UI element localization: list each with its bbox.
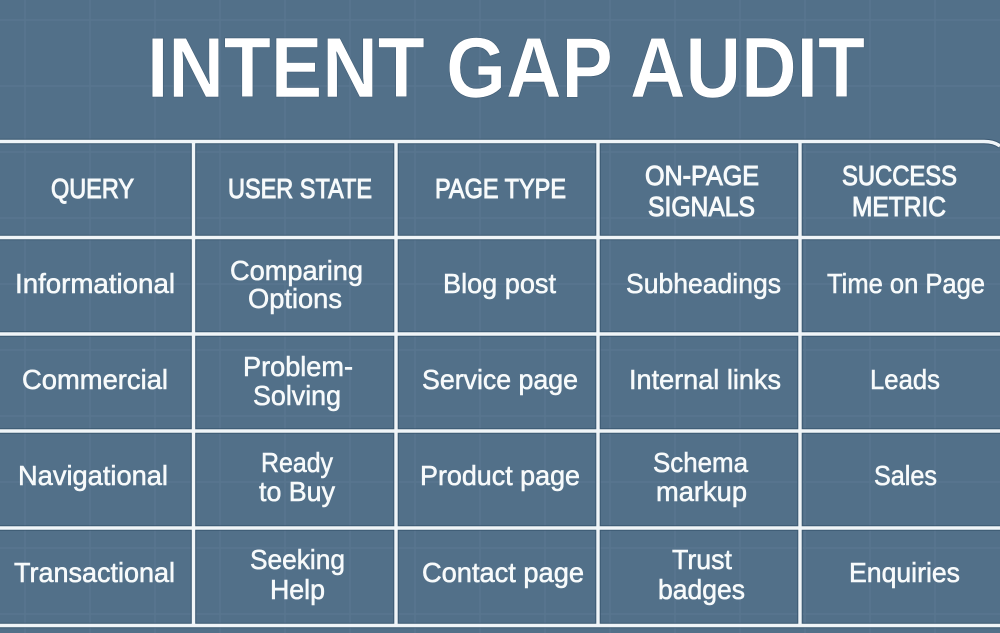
cell: problem-solving: Problem- xyxy=(243,351,353,382)
cell: seeking help: Seeking xyxy=(250,544,345,575)
cell: ready to buy: to Buy xyxy=(259,476,335,507)
cell: time on page: Time on Page xyxy=(827,268,985,299)
header: page type: PAGE TYPE xyxy=(435,173,566,204)
row: commercial xyxy=(22,351,940,411)
cell: internal links: Internal links xyxy=(629,364,781,395)
cell: product page: Product page xyxy=(420,460,580,491)
header: on-page signals: SIGNALS xyxy=(648,191,755,222)
cell: trust badges xyxy=(658,544,745,605)
cell: schema markup: Schema xyxy=(653,447,749,478)
title: INTENT GAP AUDIT xyxy=(147,21,865,116)
cell: problem-solving: Solving xyxy=(253,380,341,411)
row: informational xyxy=(15,255,985,314)
header: success metric xyxy=(842,160,957,222)
row: transactional xyxy=(14,544,960,605)
cell: enquiries: Enquiries xyxy=(849,557,960,588)
cell: seeking help: Help xyxy=(270,574,325,605)
header: on-page signals xyxy=(645,160,759,222)
cell: navigational: Navigational xyxy=(18,460,168,491)
cell: schema markup: markup xyxy=(656,476,747,507)
cell: ready to buy xyxy=(259,447,335,507)
cell: comparing options: Options xyxy=(248,283,342,314)
cell: sales: Sales xyxy=(874,460,937,491)
cell: ready to buy: Ready xyxy=(261,447,333,478)
cell: seeking help xyxy=(250,544,345,605)
cell: schema markup xyxy=(653,447,749,507)
cell: informational: Informational xyxy=(15,268,175,299)
cell: blog post: Blog post xyxy=(443,268,556,299)
cell: service page: Service page xyxy=(422,364,578,395)
cell: comparing options xyxy=(230,255,363,314)
cell: leads: Leads xyxy=(870,364,940,395)
header row xyxy=(51,160,957,222)
table xyxy=(0,142,1000,626)
header: user state: USER STATE xyxy=(228,173,372,204)
cell: trust badges: Trust xyxy=(672,544,732,575)
cell: commercial: Commercial xyxy=(22,364,168,395)
header: success metric: METRIC xyxy=(852,191,946,222)
row: navigational xyxy=(18,447,937,507)
cell: problem-solving xyxy=(243,351,353,411)
header: success metric: SUCCESS xyxy=(842,160,957,191)
cell: transactional: Transactional xyxy=(14,557,175,588)
cell: contact page: Contact page xyxy=(422,557,584,588)
header: query: QUERY xyxy=(51,173,134,204)
cell: comparing options: Comparing xyxy=(230,255,363,286)
cell: subheadings: Subheadings xyxy=(626,268,781,299)
header: on-page signals: ON-PAGE xyxy=(645,160,759,191)
cell: trust badges: badges xyxy=(658,574,745,605)
